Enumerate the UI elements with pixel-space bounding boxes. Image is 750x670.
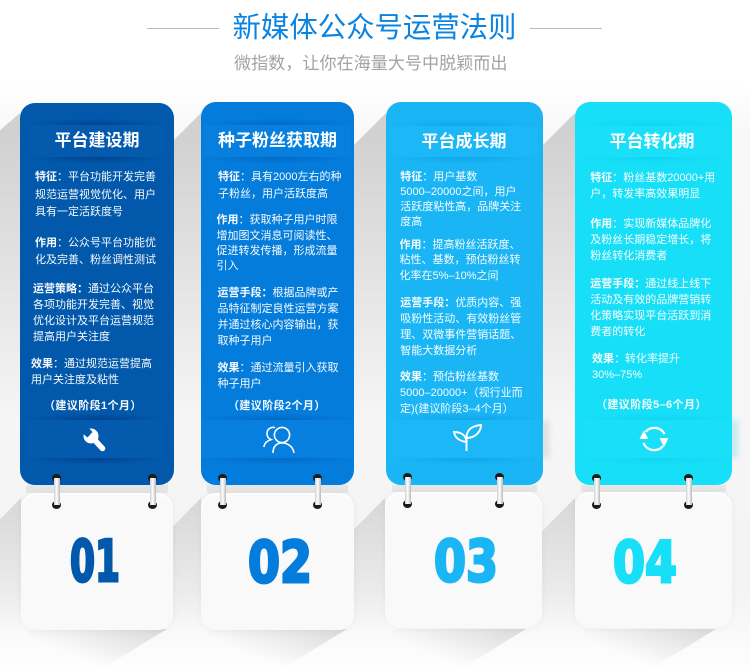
number 02: 02 [248,530,312,596]
calendar page [201,493,354,630]
calendar page [575,492,732,628]
text: 作用 [216,214,338,272]
text: 特征: 具有一定活跃度号 [35,206,123,218]
text: 特征: 特征：具有2000左右的种 [218,171,341,183]
text: 效果: 定)(建议阶段3–4个月） [400,403,514,415]
ring right [148,474,157,509]
text: 特征: 活跃度粘性高，品牌关注 [400,201,521,213]
text: 运营手段: 品特征制定良性运营方案 [218,303,338,315]
ring right [684,474,693,509]
calendar page [385,492,542,628]
text: 作用: 作用：获取种子用户时限 [216,214,338,226]
text: 运营手段 [218,286,338,347]
heading: 平台转化期 [610,132,694,151]
text: 作用: 作用：实现新媒体品牌化 [590,218,711,230]
text: 运营策略: 运营策略：通过公众平台 [33,283,154,295]
ring left [403,473,412,508]
text: 效果 [31,358,152,386]
heading band [204,125,351,157]
text: 特征: 度高 [400,216,422,228]
text: 作用: 及粉丝长期稳定增长，将 [590,234,711,246]
ring right [313,474,322,509]
text: 效果 [400,370,523,415]
text: 效果: 30%–75% [592,369,642,381]
text: 建议阶段: （建议阶段1个月） [44,400,142,412]
text: 运营手段: 费者的转化 [590,326,645,338]
card body [575,102,732,485]
card side glow [730,420,738,458]
text: 运营手段: 智能大数据分析 [400,345,477,357]
heading band [29,125,165,157]
ring right [495,473,504,508]
text: 运营手段: 运营手段：通过线上线下 [590,278,711,290]
subtitle: 微指数，让你在海量大号中脱颖而出 [234,54,508,73]
text: 运营手段: 运营手段：根据品牌或产 [218,287,338,299]
icon: users [263,426,295,454]
text: 效果 [592,352,680,381]
icon band [583,420,732,458]
icon: wrench [84,428,106,452]
ring left [592,474,601,509]
text: 作用: 化率在5%–10%之间 [400,270,499,282]
text: 运营手段 [590,278,711,338]
panel: 平台转化期 [575,102,740,596]
text: 效果 [218,362,338,390]
text: 效果: 效果：转化率提升 [592,353,680,365]
text: 建议阶段: （建议阶段5–6个月） [596,399,707,411]
card body [20,103,174,485]
text: 作用: 促进转发传播，形成流量 [216,245,338,257]
text: 效果: 用户关注度及粘性 [31,374,119,386]
text: 效果: 5000–20000+（视行业而 [400,387,523,399]
text: 特征: 规范运营视觉优化、用户 [35,188,156,200]
text: 作用: 作用：公众号平台功能优 [35,237,156,249]
icon band [391,420,543,458]
text: 效果: 效果：通过流量引入获取 [218,362,338,374]
text: 特征 [35,170,156,218]
heading band [577,126,727,157]
number 01: 01 [70,529,120,595]
text: 特征 [590,172,715,200]
text: 特征: 特征：用户基数 [400,171,477,183]
text: 特征: 特征：粉丝基数20000+用 [590,172,715,184]
text: 运营策略 [33,282,154,343]
text: 运营手段: 理、双微事件营销话题、 [400,329,521,341]
card body [386,102,543,485]
title: 新媒体公众号运营法则 [233,12,516,44]
number 04: 04 [613,530,677,596]
panel: 种子粉丝获取期 [201,102,354,630]
text: 运营手段: 活动及有效的品牌营销转 [590,294,711,306]
text: 运营策略: 优化设计及平台运营规范 [33,315,154,327]
text: 运营策略: 各项功能开发完善、视觉 [33,299,154,311]
icon band [27,420,163,458]
text: 运营手段 [400,296,521,357]
ring left [52,474,61,509]
card side glow [541,420,549,458]
panel: 平台建设期 [20,103,174,630]
text: 运营策略: 提高用户关注度 [33,331,110,343]
text: 运营手段: 取种子用户 [218,335,272,347]
heading: 平台建设期 [54,131,140,150]
calendar page [21,493,173,630]
text: 效果: 效果：预估粉丝基数 [400,371,499,383]
text: 特征: 5000–20000之间，用户 [400,186,516,198]
text: 作用 [35,236,156,266]
text: 作用: 粉丝转化消费者 [590,250,667,262]
text: 特征: 子粉丝，用户活跃度高 [218,188,328,200]
heading: 种子粉丝获取期 [218,131,337,150]
icon: sprout [453,424,482,451]
text: 作用: 作用：提高粉丝活跃度、 [400,238,520,250]
text: 作用: 引入 [216,260,238,272]
text: 运营手段: 运营手段：优质内容、强 [400,297,521,309]
icon: refresh [640,426,668,452]
text: 特征: 户，转发率高效果明显 [590,188,700,200]
text: 作用 [400,238,520,282]
panel: 平台成长期 [386,102,550,612]
text: 特征 [218,170,341,200]
text: 运营手段: 吸粉性活动、有效粉丝管 [400,313,521,325]
text: 作用: 粘性、基数，预估粉丝转 [400,254,520,266]
text: 特征: 特征：平台功能开发完善 [35,171,156,183]
text: 效果: 效果：通过规范运营提高 [31,358,152,370]
ring left [218,474,227,509]
text: 效果: 种子用户 [218,378,262,390]
text: 运营手段: 并通过核心内容输出，获 [218,319,338,331]
text: 作用: 增加图文消息可阅读性、 [216,230,338,242]
heading: 平台成长期 [422,132,506,151]
text: 建议阶段: （建议阶段2个月） [228,400,326,412]
text: 作用 [590,218,711,262]
heading band [390,126,538,157]
icon band [201,420,354,458]
text: 特征 [400,170,521,228]
text: 运营手段: 化策略实现平台活跃到消 [590,310,711,322]
text: 作用: 化及完善、粉丝调性测试 [35,254,156,266]
number 03: 03 [434,529,498,595]
card body [201,102,354,485]
